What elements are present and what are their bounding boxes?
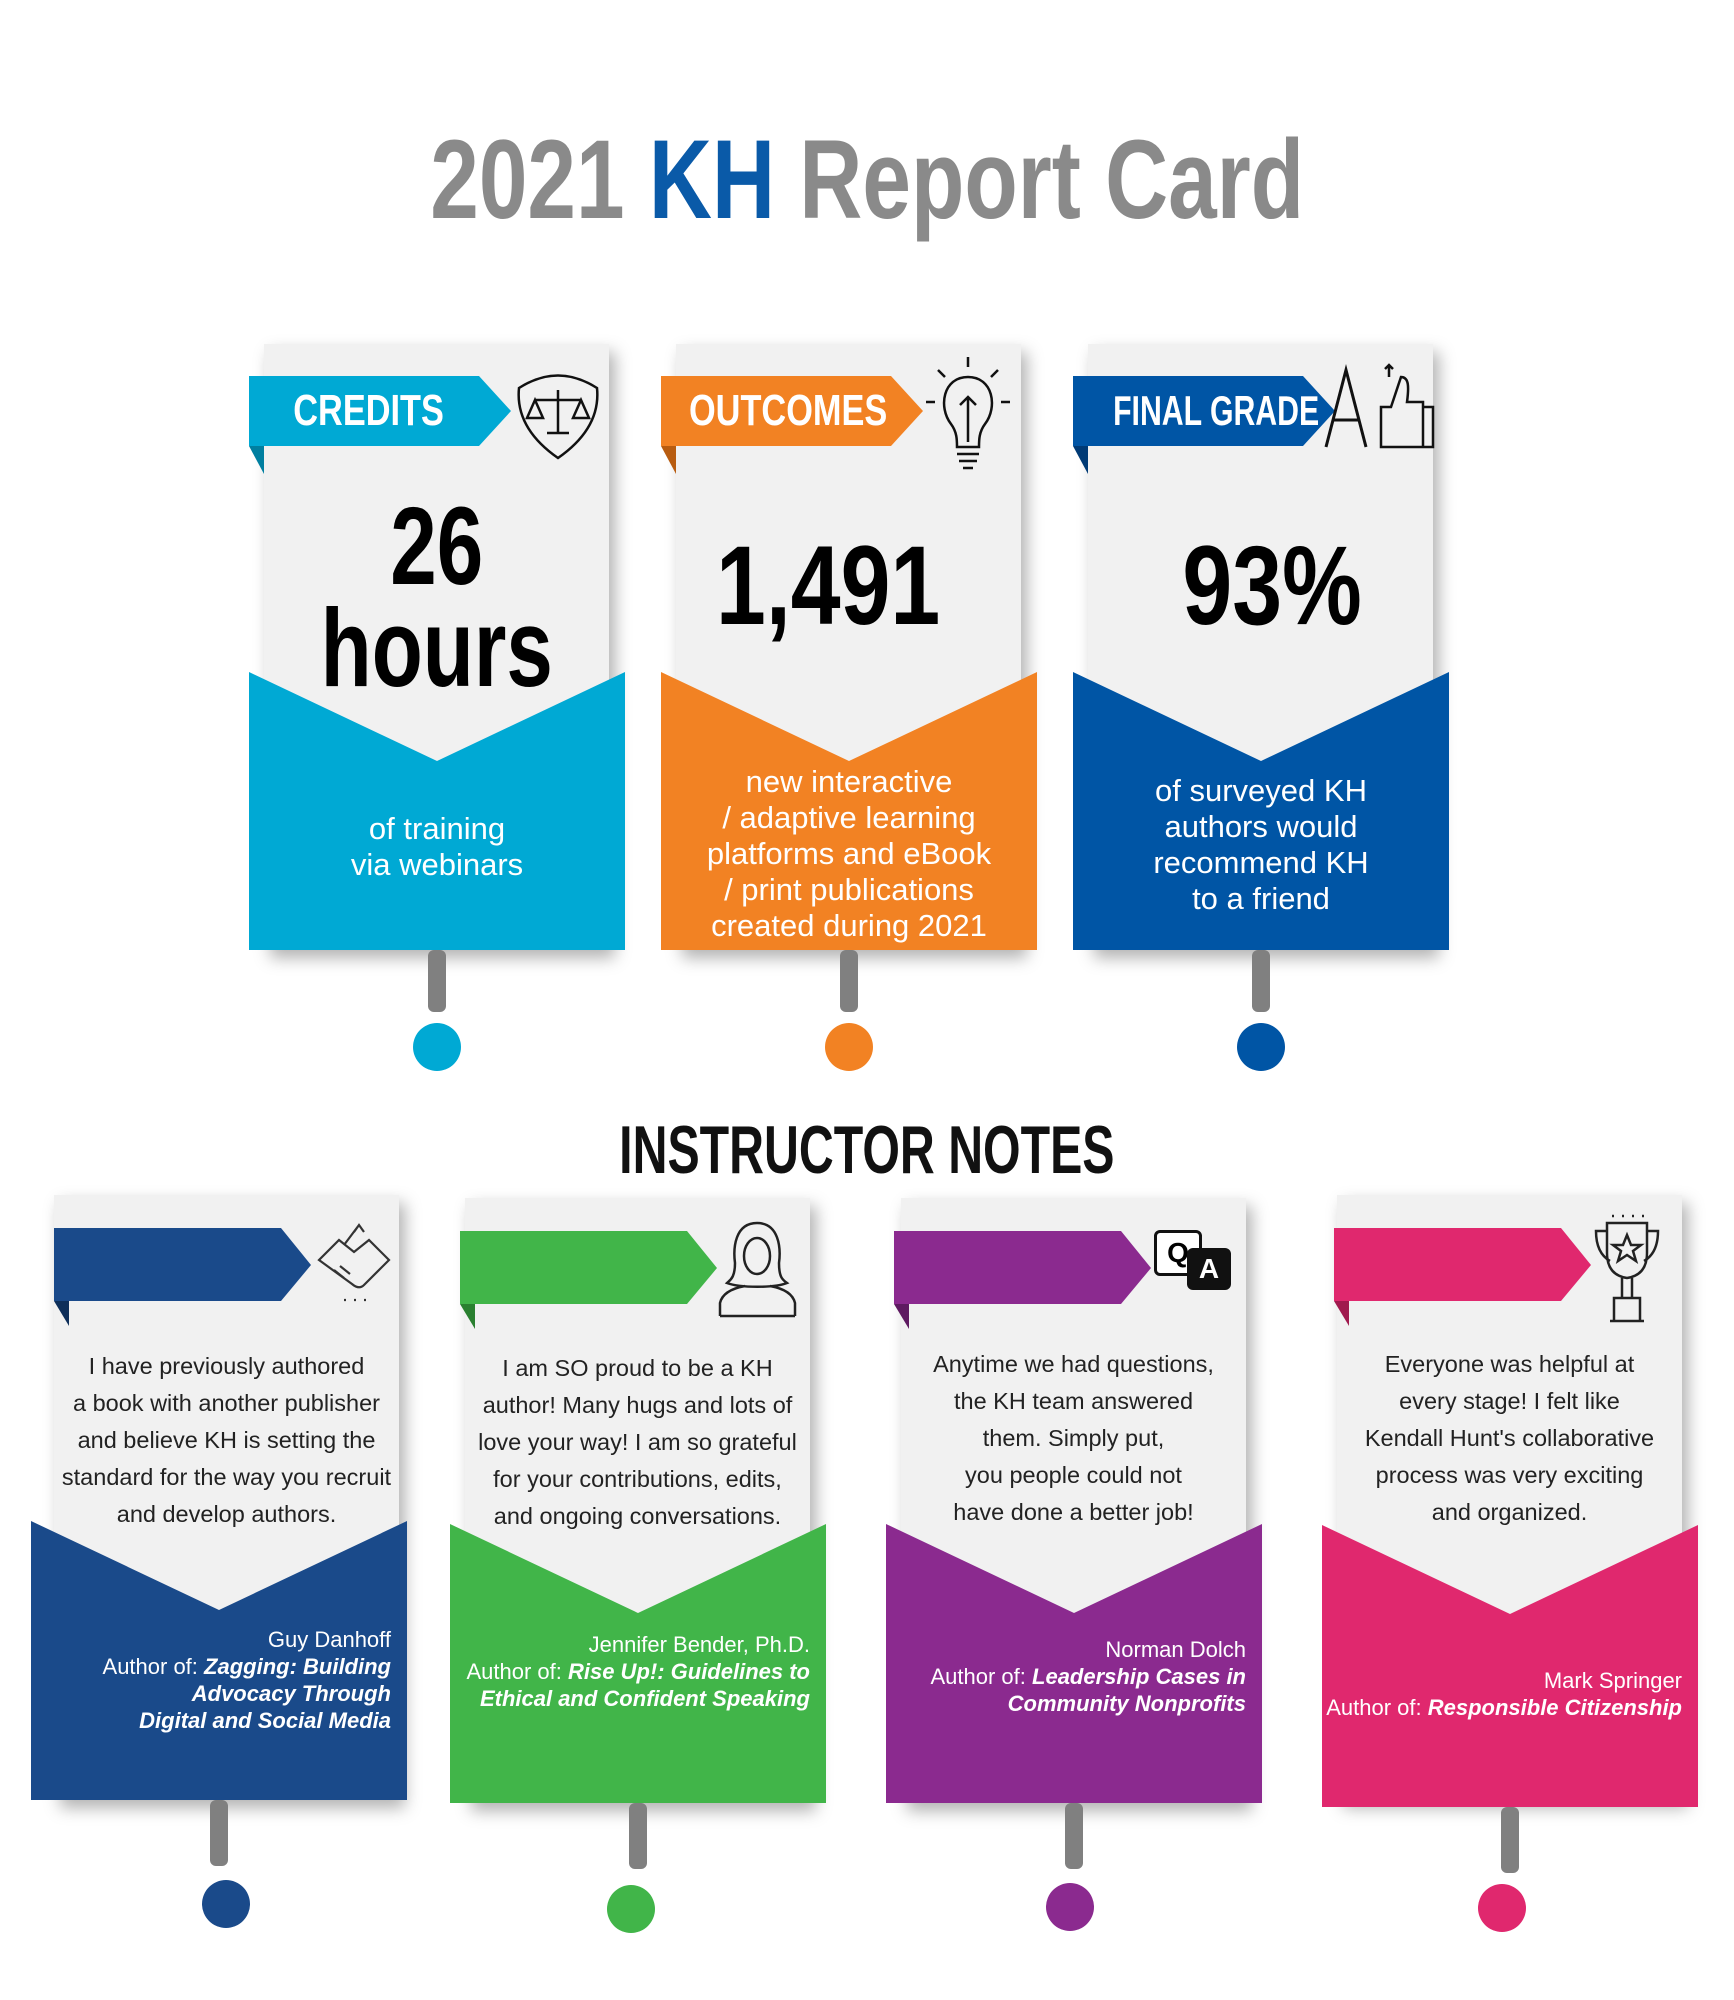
icon: Q&A bubbles [1154, 1230, 1231, 1290]
text: quote 4: Everyone was helpful at [1385, 1351, 1634, 1377]
text: quote 4: and organized. [1432, 1499, 1587, 1525]
stat: 26 hours: hours [320, 587, 553, 710]
icon: Q&A bubbles: A [1199, 1253, 1219, 1284]
text: quote 1: a book with another publisher [73, 1390, 380, 1416]
text: quote 4: Kendall Hunt's collaborative [1365, 1425, 1654, 1451]
text: credits description: via webinars [351, 847, 523, 882]
text: author 4: Author of: Responsible Citizenship [1326, 1695, 1682, 1720]
text: outcomes description [707, 764, 992, 943]
text: outcomes description: / adaptive learning [722, 800, 976, 835]
text: quote 2: for your contributions, edits, [493, 1466, 782, 1492]
text: final grade description: recommend KH [1153, 845, 1369, 880]
text: quote 3: the KH team answered [954, 1388, 1193, 1414]
panel: note Mark Springer [1322, 1194, 1698, 1932]
text: quote 1: I have previously authored [89, 1353, 364, 1379]
panel: credits [249, 342, 625, 1071]
text: final grade description: to a friend [1192, 881, 1330, 916]
icon: person [718, 1222, 796, 1318]
stat: 26 hours [320, 485, 553, 710]
text: outcomes description: new interactive [746, 764, 952, 799]
icon: Q&A bubbles: Q [1167, 1237, 1189, 1268]
text: author 3: Norman Dolch [1105, 1637, 1246, 1662]
text: outcomes description: created during 2021 [711, 908, 987, 943]
text: author 2: Jennifer Bender, Ph.D. [589, 1632, 810, 1657]
title: 2021 KH Report Card [430, 117, 1304, 242]
text: quote 4: every stage! I felt like [1399, 1388, 1620, 1414]
text: quote 3: them. Simply put, [983, 1425, 1164, 1451]
icon: A grade thumbs up [1324, 363, 1434, 448]
text: author 4: Mark Springer [1544, 1668, 1682, 1693]
text: final grade description [1153, 773, 1369, 916]
text: quote 4: process was very exciting [1376, 1462, 1643, 1488]
stat: 26 hours: 26 [390, 485, 483, 608]
text: credits description: of training [369, 811, 505, 846]
panel: note Jennifer Bender [450, 1196, 826, 1933]
panel: note Norman Dolch [886, 1196, 1262, 1931]
text: credits description [351, 811, 523, 882]
text: author 1: Advocacy Through [192, 1681, 391, 1706]
text: quote 1: and believe KH is setting the [78, 1427, 375, 1453]
text: quote 2 [478, 1355, 797, 1529]
text: quote 1: standard for the way you recruit [62, 1464, 391, 1490]
text: quote 1: and develop authors. [117, 1501, 336, 1527]
text: final grade description: of surveyed KH [1155, 773, 1367, 808]
stat: 93%: 93% [1183, 523, 1362, 648]
text: quote 3 [933, 1351, 1214, 1525]
text: final grade description: authors would [1164, 809, 1358, 844]
heading: credits: CREDITS [294, 386, 444, 435]
text: quote 3: Anytime we had questions, [933, 1351, 1214, 1377]
text: author 1: Guy Danhoff [268, 1627, 391, 1652]
panel: final grade [1073, 342, 1449, 1071]
panel: note Guy Danhoff [31, 1194, 414, 1928]
icon: scales shield [517, 374, 599, 460]
icon: trophy [1594, 1214, 1660, 1322]
text: author 3 [930, 1637, 1246, 1716]
text: quote 3: you people could not [965, 1462, 1182, 1488]
heading: final grade: FINAL GRADE [1113, 387, 1319, 434]
text: quote 2: love your way! I am so grateful [478, 1429, 797, 1455]
heading: outcomes: OUTCOMES [689, 386, 887, 435]
text: quote 2: and ongoing conversations. [494, 1503, 781, 1529]
text: outcomes description: / print publications [724, 872, 974, 907]
stat: 1,491: 1,491 [716, 523, 941, 648]
icon: handshake [317, 1223, 390, 1302]
text: author 1: Digital and Social Media [139, 1708, 391, 1733]
text: quote 1 [62, 1353, 391, 1527]
text: author 3: Community Nonprofits [1008, 1691, 1246, 1716]
heading: instructor notes: INSTRUCTOR NOTES [619, 1112, 1115, 1188]
panel: outcomes [661, 342, 1037, 1071]
text: quote 2: author! Many hugs and lots of [483, 1392, 792, 1418]
text: quote 3: have done a better job! [953, 1499, 1194, 1525]
text: author 1: Author of: Zagging: Building [103, 1654, 391, 1679]
text: quote 4 [1365, 1351, 1654, 1525]
text: author 2 [466, 1632, 810, 1711]
text: author 3: Author of: Leadership Cases in [930, 1664, 1246, 1689]
text: author 4 [1326, 1668, 1682, 1720]
text: author 2: Author of: Rise Up!: Guidelines to [466, 1659, 810, 1684]
text: author 2: Ethical and Confident Speaking [480, 1686, 810, 1711]
icon: lightbulb [926, 357, 1010, 470]
text: author 1 [102, 1627, 392, 1733]
text: quote 2: I am SO proud to be a KH [502, 1355, 773, 1381]
text: outcomes description: platforms and eBook [707, 836, 991, 871]
